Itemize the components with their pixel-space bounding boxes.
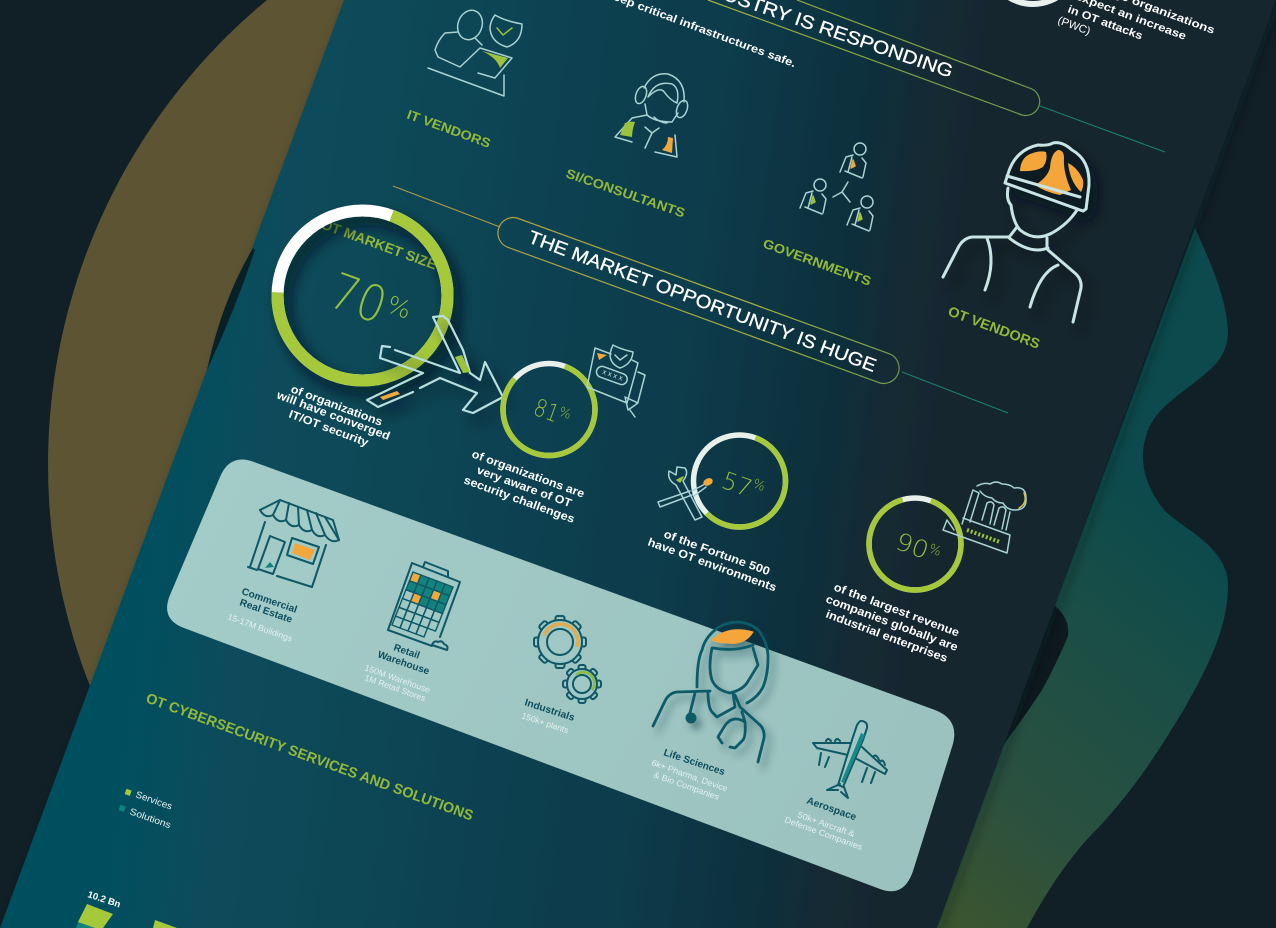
sheet shadow sliver	[207, 248, 255, 370]
icon: airplane	[813, 721, 887, 798]
value: 70%: %	[383, 290, 415, 325]
label: commercial real estate	[226, 586, 299, 644]
label: SI consultants: SI/CONSULTANTS	[564, 166, 687, 221]
top right stat	[987, 0, 1216, 43]
value: 57%: 57	[718, 466, 756, 503]
top section header	[642, 0, 1165, 152]
icon: gears	[534, 616, 601, 703]
background shape: green wave	[937, 228, 1228, 928]
small gear	[563, 665, 601, 703]
caption: 70%	[274, 384, 392, 449]
value: 90%: %	[927, 542, 943, 560]
heading pill: industry	[708, 0, 1040, 115]
chart: 57% ring	[681, 422, 798, 540]
caption: 81%: very aware of OT	[475, 465, 573, 510]
icon: OT vendor hard hat	[943, 143, 1089, 322]
caption: 57%: have OT environments	[646, 537, 778, 594]
stat text: in OT attacks	[1066, 4, 1144, 42]
leader line right	[902, 372, 1008, 413]
stat text: (PWC)	[1056, 15, 1092, 38]
label: aerospace	[783, 795, 864, 852]
market opportunity header	[393, 186, 1008, 413]
caption: 81%: security challenges	[462, 475, 576, 526]
caption: 90%: of the largest revenue	[832, 582, 961, 639]
label: life sciences	[650, 747, 729, 802]
label: OT vendors: OT VENDORS	[946, 303, 1042, 352]
label: retail warehouse: 150M Warehouse	[363, 662, 432, 695]
label: life sciences: & Bio Companies	[652, 769, 721, 802]
icon: SI consultant	[615, 74, 690, 157]
icon: tools	[658, 467, 714, 520]
label: retail warehouse	[363, 642, 432, 703]
stat text	[1056, 0, 1216, 43]
person 3	[847, 196, 873, 231]
large gear	[534, 616, 586, 668]
value: 81%: 81	[530, 393, 563, 428]
icon: storefront	[248, 500, 339, 587]
background shape: brown circle	[48, 0, 420, 686]
legend: solutions: Solutions	[128, 806, 172, 831]
label: IT vendors: IT VENDORS	[405, 107, 493, 151]
value: 57%: %	[751, 477, 767, 495]
panel: industries	[167, 460, 954, 891]
caption: 70%: will have converged	[274, 389, 392, 443]
chart: 81% ring	[490, 351, 608, 468]
label: industrials	[520, 697, 576, 735]
label: life sciences: 6k+ Pharma, Device	[650, 757, 729, 794]
bar: first, solutions	[76, 922, 95, 928]
leader line	[1040, 106, 1165, 152]
label: life sciences: Life Sciences	[662, 747, 727, 778]
label: aerospace: 50k+ Aircraft &	[796, 809, 857, 839]
bar: second, services	[153, 920, 177, 928]
icon: IT vendors	[428, 7, 522, 96]
icon: governments	[800, 143, 873, 231]
caption: 90%: companies globally are	[824, 594, 959, 654]
legend: services: Services	[134, 789, 174, 813]
label: commercial real estate: Commercial	[240, 586, 299, 616]
value: 81%: %	[557, 405, 573, 423]
label: OT market size: OT MARKET SIZE	[319, 216, 439, 273]
icon: security window: xxxx	[601, 367, 624, 383]
caption: 70%: IT/OT security	[287, 409, 370, 449]
legend	[119, 789, 174, 831]
icon: office building	[388, 562, 460, 650]
icon: factory	[943, 482, 1026, 553]
chart: 90% ring	[856, 485, 974, 603]
caption: 90%	[824, 582, 961, 665]
caption: 57%: of the Fortune 500	[662, 529, 771, 578]
person 2	[800, 179, 826, 214]
label: governments: GOVERNMENTS	[761, 236, 874, 289]
caption: 90%: industrial enterprises	[824, 609, 949, 665]
caption: 81%: of organizations are	[470, 449, 586, 501]
heading: market opportunity: THE MARKET OPPORTUNITY IS HUGE	[526, 226, 879, 376]
label: retail warehouse: 1M Retail Stores	[363, 672, 427, 703]
caption: 70%: of organizations	[289, 384, 384, 429]
icon: airplane arrow	[367, 316, 503, 413]
person 1	[840, 143, 866, 178]
label: commercial real estate: Real Estate	[238, 597, 294, 626]
label: aerospace: Defense Companies	[783, 814, 864, 852]
value label: 10.2 Bn	[86, 889, 122, 910]
heading: services and solutions: OT CYBERSECURITY SERVICES AND SOLUTIONS	[144, 691, 475, 825]
label: retail warehouse: Warehouse	[376, 649, 431, 678]
label: commercial real estate: 15-17M Buildings	[226, 611, 294, 644]
icon: doctor	[653, 622, 768, 762]
heading pill	[498, 218, 899, 383]
background shape: dark notch	[985, 602, 1068, 790]
bar: first, services	[78, 904, 113, 928]
ring fragment	[987, 0, 1079, 4]
icon: security window	[587, 345, 645, 417]
value: 90%: 90	[892, 527, 933, 565]
bar chart	[76, 889, 177, 928]
caption: 81%	[462, 449, 586, 526]
label: industrials: Industrials	[523, 697, 576, 724]
leader line left	[393, 186, 500, 227]
chart: 70% ring	[254, 187, 471, 404]
label: retail warehouse: Retail	[392, 642, 421, 662]
label: industrials: 150k+ plants	[520, 710, 570, 735]
label: aerospace: Aerospace	[805, 795, 858, 823]
value: 70%: 70	[322, 262, 394, 335]
